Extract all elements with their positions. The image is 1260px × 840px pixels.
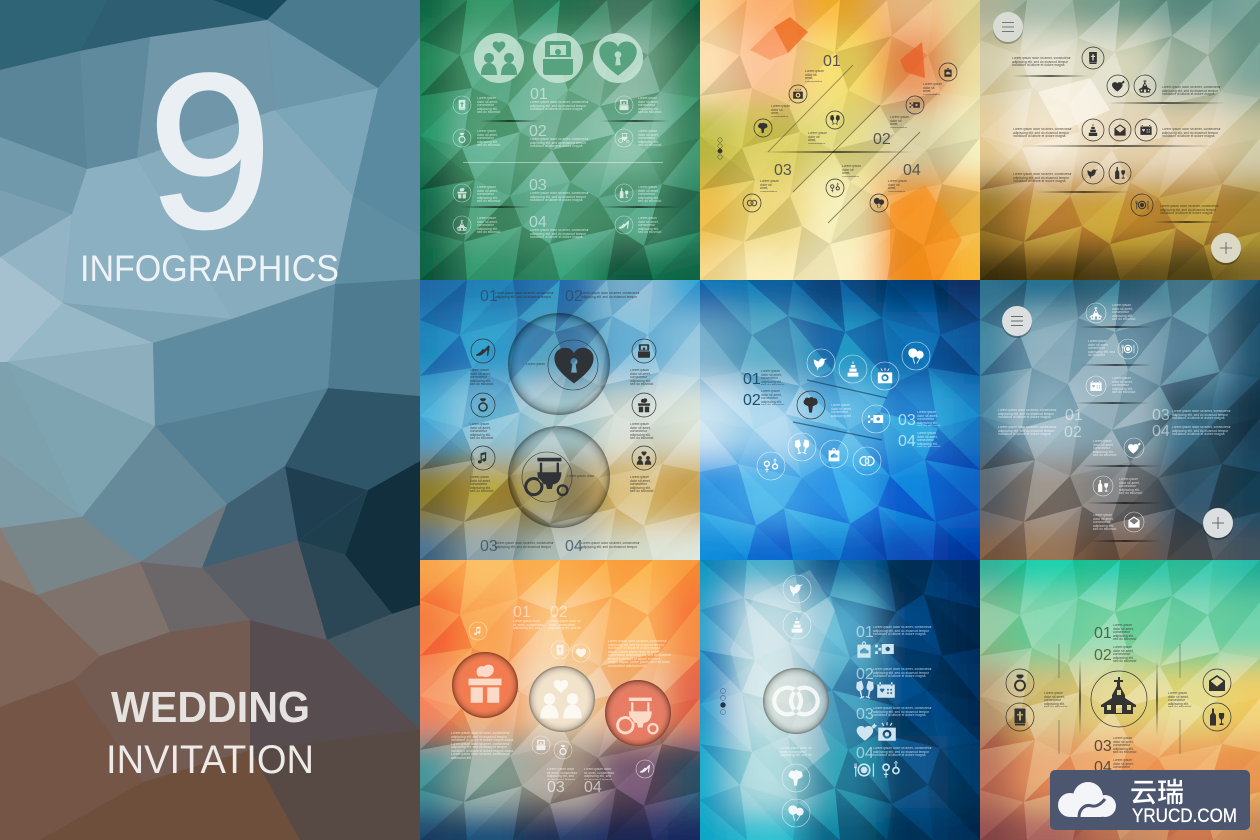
sphere: gift <box>452 652 518 718</box>
icon: bouquet <box>782 764 810 792</box>
icon: ring <box>1006 669 1034 697</box>
icon row 3 <box>857 722 896 741</box>
number 01: 01 <box>513 604 531 621</box>
icon: cake <box>1082 119 1104 141</box>
faceted background <box>660 520 1020 840</box>
icon: bag <box>820 440 848 468</box>
number 04: 04 <box>565 538 583 555</box>
number 03: 03 <box>774 162 792 179</box>
icon row 1 <box>857 641 894 658</box>
faceted background <box>940 0 1260 320</box>
icon: cloud <box>1058 782 1116 817</box>
number 02: 02 <box>856 666 874 683</box>
number 04: 04 <box>898 433 916 450</box>
panel: teal navy infographic <box>700 560 980 840</box>
pagination dots <box>720 688 726 714</box>
icon: rings <box>743 194 761 212</box>
icon: church <box>1086 303 1106 323</box>
button: plus <box>1203 508 1233 540</box>
number 01: 01 <box>1065 407 1083 424</box>
icon: rings <box>853 447 881 475</box>
pagination dots <box>718 138 722 159</box>
button: menu <box>993 12 1023 44</box>
number 02: 02 <box>743 392 761 409</box>
number 01: 01 <box>823 53 841 70</box>
number 03: 03 <box>898 412 916 429</box>
icon: bible <box>1006 703 1034 731</box>
icon: flutes <box>826 111 844 129</box>
sphere: carriage <box>605 680 671 746</box>
icon: gender <box>757 452 785 480</box>
faceted background <box>0 0 420 840</box>
icon: camera <box>871 362 899 390</box>
panel: sunset infographic <box>420 560 700 840</box>
sphere: couple <box>529 666 595 732</box>
number 02: 02 <box>529 123 547 140</box>
icon: music <box>469 622 487 640</box>
icon: shoe <box>615 216 633 234</box>
number 02: 02 <box>550 604 568 621</box>
icon: envelope <box>1124 512 1144 532</box>
heading: infographics: INFOGRAPHICS <box>80 248 339 289</box>
icon row 2 <box>856 681 895 699</box>
icon: bottle <box>1203 703 1231 731</box>
heading: wedding: WEDDING <box>111 683 310 732</box>
icon: shoe <box>636 760 654 778</box>
icon: dove <box>807 349 835 377</box>
icon: cake <box>939 63 957 81</box>
number 03: 03 <box>547 779 565 796</box>
icon: ring <box>471 393 495 417</box>
icon: box <box>532 736 550 754</box>
faceted background <box>660 240 1020 600</box>
icon: plate <box>1118 339 1138 359</box>
diagonal shadow lines <box>763 65 920 223</box>
sphere: carriage <box>508 426 610 528</box>
faceted background <box>380 520 740 840</box>
icon: gift <box>632 393 656 417</box>
sphere: rings <box>763 668 829 734</box>
icon: bible <box>1082 47 1104 69</box>
panel: blue and gold spheres infographic <box>420 280 700 560</box>
faceted background <box>380 0 740 320</box>
number 02: 02 <box>873 131 891 148</box>
icon: couple <box>474 33 524 83</box>
number 03: 03 <box>1152 407 1170 424</box>
button: menu <box>1002 306 1032 338</box>
panel: cream olive infographic <box>980 0 1260 280</box>
icon: balloons <box>782 799 810 827</box>
icon: bible <box>551 641 569 659</box>
faceted background <box>380 240 740 600</box>
icon: carriage <box>615 129 633 147</box>
number 01: 01 <box>1094 625 1112 642</box>
divider <box>460 120 680 208</box>
icon: key heart <box>593 33 643 83</box>
button: plus <box>1211 233 1241 265</box>
number 03: 03 <box>856 706 874 723</box>
icon: church <box>1091 671 1147 727</box>
icon: bottle <box>1093 476 1113 496</box>
watermark logo <box>1050 770 1250 830</box>
big number 9: 9 <box>148 29 272 275</box>
panel: yellow orange infographic <box>700 0 980 280</box>
logo text: yunrui: 云瑞 <box>1130 778 1184 808</box>
icon: cake <box>839 355 867 383</box>
panel: slate infographic <box>980 280 1260 560</box>
icon: envelope <box>1203 669 1231 697</box>
faceted background <box>660 0 1020 320</box>
icon: calendar <box>1086 376 1106 396</box>
number 01: 01 <box>743 371 761 388</box>
icon: ring <box>554 741 572 759</box>
icon: balloons <box>902 342 930 370</box>
icon: dove <box>1082 162 1104 184</box>
icon: box <box>632 339 656 363</box>
panel: bright blue infographic <box>700 280 980 560</box>
icon: arrow heart <box>1107 75 1129 97</box>
sphere: heart <box>508 313 610 415</box>
icon row 4 <box>854 761 900 778</box>
panel: green peach infographic <box>980 560 1260 840</box>
icon: calendar <box>1135 119 1157 141</box>
number 01: 01 <box>480 288 498 305</box>
number 01: 01 <box>856 624 874 641</box>
icon: gift <box>453 184 471 202</box>
panel: left title cover <box>0 0 420 840</box>
number 03: 03 <box>480 538 498 555</box>
icon: balloons <box>870 194 888 212</box>
icon: church <box>453 216 471 234</box>
number 04: 04 <box>529 214 547 231</box>
icon: heart <box>572 644 590 662</box>
icon: video camera <box>906 96 924 114</box>
shadow lines <box>1013 75 1225 223</box>
icon: bible <box>453 96 471 114</box>
faceted background <box>940 520 1260 840</box>
faceted background <box>940 240 1260 600</box>
icon: dove <box>783 575 811 603</box>
number 02: 02 <box>565 288 583 305</box>
number 04: 04 <box>1094 759 1112 776</box>
icon: box <box>615 96 633 114</box>
icon: arrow heart <box>1124 438 1144 458</box>
shadow lines <box>793 380 887 440</box>
icon: cake <box>783 611 811 639</box>
icon: bottle <box>1109 162 1131 184</box>
number 04: 04 <box>584 779 602 796</box>
shadow lines <box>1075 326 1163 542</box>
icon: bouquet <box>797 391 825 419</box>
icon: plate <box>1131 194 1153 216</box>
icon: gender <box>826 179 844 197</box>
icon: music <box>471 446 495 470</box>
icon: ring <box>453 129 471 147</box>
icon: ring box <box>533 33 583 83</box>
icon: bouquet <box>754 119 772 137</box>
number 02: 02 <box>1094 647 1112 664</box>
icon: church <box>1134 75 1156 97</box>
number 03: 03 <box>529 177 547 194</box>
vertical lines <box>1059 644 1180 754</box>
number 03: 03 <box>1094 738 1112 755</box>
logo text: yrucd.com: YRUCD.COM <box>1132 806 1237 827</box>
number 04: 04 <box>856 745 874 762</box>
number 02: 02 <box>1064 424 1082 441</box>
icon: shoe <box>471 339 495 363</box>
icon: flutes <box>788 433 816 461</box>
icon: video camera <box>862 405 890 433</box>
number 01: 01 <box>530 86 548 103</box>
panel: green infographic <box>420 0 700 280</box>
number 04: 04 <box>903 162 921 179</box>
icon: couple <box>632 446 656 470</box>
number 04: 04 <box>1152 423 1170 440</box>
icon: camera <box>789 85 807 103</box>
icon: envelope <box>1109 119 1131 141</box>
heading: invitation: INVITATION <box>106 738 314 782</box>
icon: bottle <box>615 184 633 202</box>
